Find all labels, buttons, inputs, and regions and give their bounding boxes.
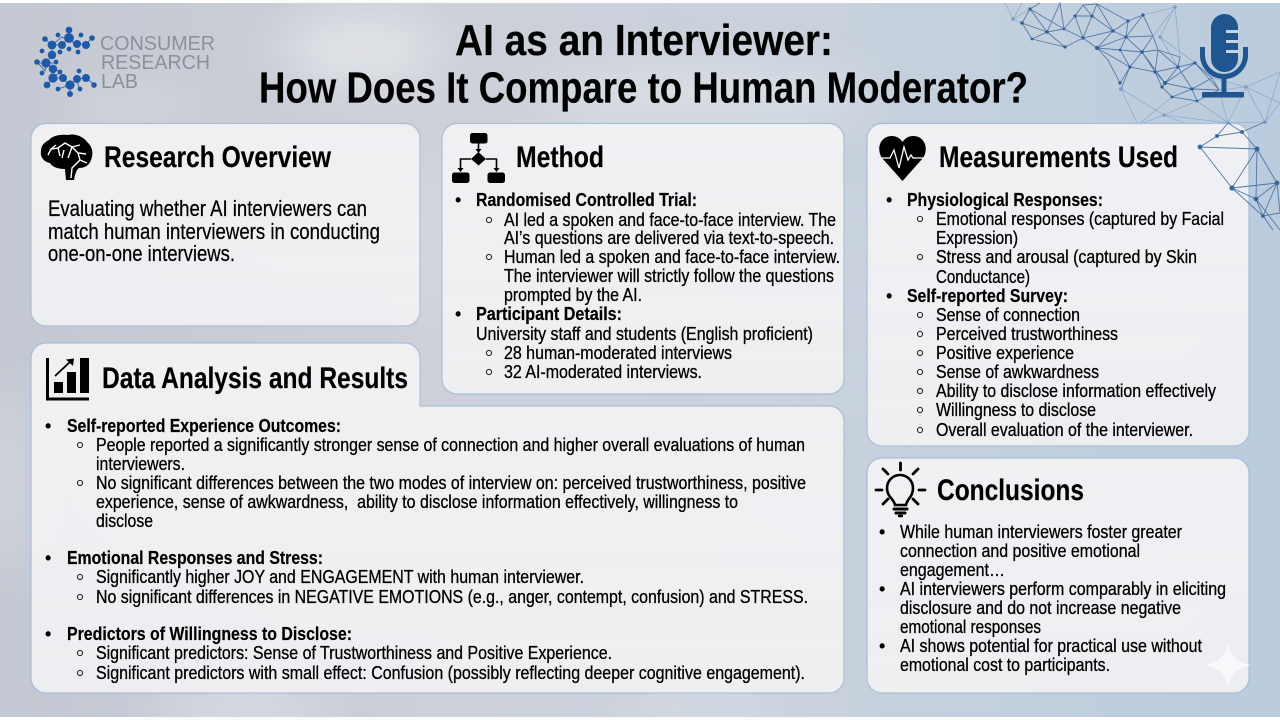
text block: measurements list: Willingness to disclose (936, 400, 1096, 420)
text block: emotional responses and stress: Emotional Responses and Stress: (67, 548, 323, 568)
icon: microphone (1202, 14, 1246, 98)
text block: measurements list (886, 190, 1224, 440)
text block: emotional responses and stress: No significant differences in NEGATIVE EMOTIONS (e.g., anger, contempt, confusion) and STRESS. (96, 587, 808, 607)
panel: data analysis and results (31, 343, 844, 693)
text block: measurements list: • (886, 190, 892, 210)
icon: brain (41, 134, 92, 180)
text block: self-reported experience outcomes: • (45, 416, 51, 436)
icon: light bulb (876, 463, 925, 516)
panel background (31, 343, 844, 693)
text block: measurements list: Sense of connection (936, 305, 1080, 325)
text block: predictors of willingness to disclose: Predictors of Willingness to Disclose: (67, 624, 352, 644)
heading: conclusions: Conclusions (937, 474, 1084, 507)
text block: conclusions list (879, 522, 1226, 675)
network mesh decoration: lower right, over panel corner (1198, 122, 1280, 230)
text block: overview description (48, 196, 380, 266)
panel: conclusions (867, 458, 1249, 693)
text block: measurements list: Emotional responses (captured by Facial (936, 209, 1224, 229)
text block: method details (455, 190, 840, 382)
icon: heart with pulse (879, 136, 926, 181)
panel background (31, 124, 420, 326)
text block: method details: Randomised Controlled Trial: (476, 190, 697, 210)
logo wordmark: LAB (101, 71, 138, 93)
text block: measurements list: Conductance) (936, 267, 1030, 287)
text block: measurements list: • (886, 286, 892, 306)
network mesh decoration: upper band (1005, 3, 1280, 136)
text block: method details: 28 human-moderated interviews (504, 343, 732, 363)
text block: predictors of willingness to disclose (45, 624, 805, 683)
text block: method details: University staff and students (English proficient) (476, 324, 813, 344)
text block: method details: The interviewer will strictly follow the questions (504, 266, 834, 286)
text block: emotional responses and stress: • (45, 548, 51, 568)
title: How Does It Compare to Human Moderator? (259, 64, 1028, 112)
text block: self-reported experience outcomes: Self-reported Experience Outcomes: (67, 416, 341, 436)
text block: method details: • (455, 190, 461, 210)
text block: method details: 32 AI-moderated interviews. (504, 362, 702, 382)
text block: measurements list: Expression) (936, 228, 1018, 248)
text block: overview description: Evaluating whether AI interviewers can (48, 196, 367, 221)
text block: conclusions list: disclosure and do not increase negative (900, 598, 1181, 618)
text block: conclusions list: emotional cost to participants. (900, 655, 1110, 675)
text block: overview description: one-on-one interviews. (48, 241, 235, 266)
icon: bar chart (46, 358, 89, 400)
text block: measurements list: Perceived trustworthiness (936, 324, 1118, 344)
heading: data analysis and results: Data Analysis and Results (102, 362, 408, 395)
text block: conclusions list: • (879, 636, 885, 656)
text block: predictors of willingness to disclose: Significant predictors with small effect: Confusion (possibly reflecting deeper cognitive engagement). (96, 663, 805, 683)
text block: conclusions list: AI shows potential for practical use without (900, 636, 1202, 656)
text block: conclusions list: AI interviewers perform comparably in eliciting (900, 579, 1226, 599)
logo wordmark: CONSUMER (100, 33, 215, 55)
text block: conclusions list: • (879, 522, 885, 542)
text block: method details: prompted by the AI. (504, 285, 642, 305)
panel background (867, 458, 1249, 693)
text block: method details: Human led a spoken and face-to-face interview. (504, 247, 840, 267)
text block: method details: AI led a spoken and face-to-face interview. The (504, 210, 836, 230)
text block: conclusions list: While human interviewers foster greater (900, 522, 1182, 542)
heading: research overview: Research Overview (104, 141, 332, 174)
text block: self-reported experience outcomes: experience, sense of awkwardness, ability to disclose information effectively, willingness to (96, 492, 738, 512)
text block: conclusions list: emotional responses (900, 617, 1041, 637)
text block: measurements list: Physiological Responses: (907, 190, 1103, 210)
text block: conclusions list: connection and positive emotional (900, 541, 1140, 561)
text block: measurements list: Stress and arousal (captured by Skin (936, 247, 1197, 267)
text block: predictors of willingness to disclose: Significant predictors: Sense of Trustworthiness and Positive Experience. (96, 643, 612, 663)
text block: method details: Participant Details: (476, 304, 622, 324)
sparkle mark (1205, 642, 1251, 689)
text block: self-reported experience outcomes: No significant differences between the two modes of interview on: perceived trustworthiness, positive (96, 473, 806, 493)
text block: self-reported experience outcomes: interviewers. (96, 454, 185, 474)
text block: measurements list: Overall evaluation of the interviewer. (936, 420, 1193, 440)
icon: flowchart (452, 133, 505, 183)
text block: self-reported experience outcomes: People reported a significantly stronger sense of connection and higher overall evaluations of human (96, 435, 805, 455)
logo mark: dot network C (35, 27, 96, 97)
text block: self-reported experience outcomes (45, 416, 806, 531)
text block: emotional responses and stress: Significantly higher JOY and ENGAGEMENT with human interviewer. (96, 567, 584, 587)
title (259, 16, 1028, 112)
heading: method: Method (516, 141, 604, 174)
text block: measurements list: Positive experience (936, 343, 1074, 363)
text block: overview description: match human interviewers in conducting (48, 219, 380, 244)
panel background (867, 124, 1249, 446)
panel background (442, 124, 844, 394)
text block: method details: AI’s questions are delivered via text-to-speech. (504, 228, 834, 248)
panel: research overview (31, 124, 420, 326)
text block: measurements list: Self-reported Survey: (907, 286, 1068, 306)
text block: conclusions list: • (879, 579, 885, 599)
text block: emotional responses and stress (45, 548, 808, 607)
logo: Consumer Research Lab (35, 27, 215, 97)
heading: measurements used: Measurements Used (939, 141, 1178, 174)
logo wordmark (100, 33, 215, 93)
text block: measurements list: Ability to disclose information effectively (936, 381, 1216, 401)
text block: predictors of willingness to disclose: • (45, 624, 51, 644)
panel: measurements used (867, 124, 1249, 446)
logo wordmark: RESEARCH (101, 52, 210, 74)
text block: self-reported experience outcomes: disclose (96, 511, 153, 531)
text block: measurements list: Sense of awkwardness (936, 362, 1099, 382)
text block: conclusions list: engagement… (900, 560, 1005, 580)
text block: method details: • (455, 304, 461, 324)
title: AI as an Interviewer: (455, 16, 833, 65)
panel: method (442, 124, 844, 394)
